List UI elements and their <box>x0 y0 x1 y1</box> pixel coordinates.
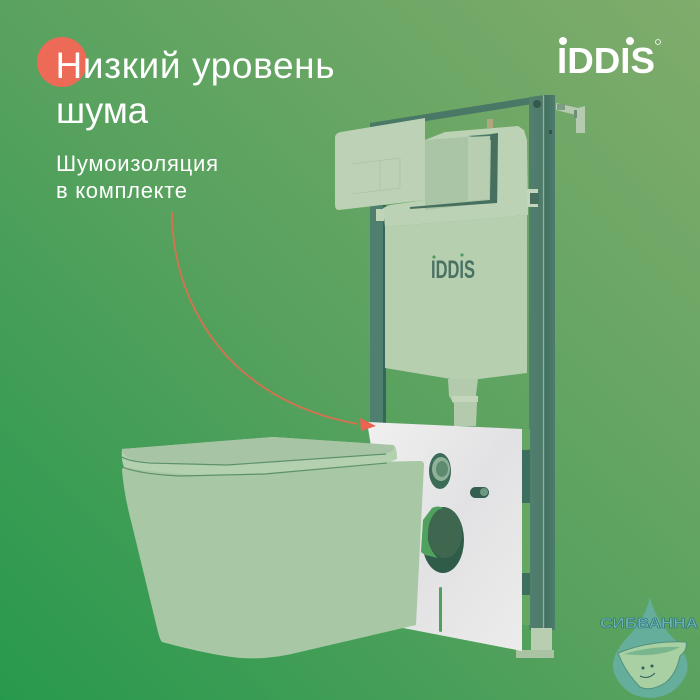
tank logo: IDDIS <box>431 256 475 284</box>
subheading: Шумоизоляция <box>56 151 218 176</box>
subheading: в комплекте <box>56 178 187 203</box>
arrow <box>172 212 376 431</box>
soundproofing panel <box>367 422 522 651</box>
slot <box>439 587 442 632</box>
subheading <box>56 151 218 203</box>
heading: шума <box>56 90 148 131</box>
heading <box>56 45 334 131</box>
tank logo <box>431 253 475 284</box>
flush plate <box>335 118 425 210</box>
watermark: Sibvanna <box>600 597 698 698</box>
toilet seat <box>122 437 397 476</box>
upper opening <box>429 453 451 489</box>
brand logo: IDDIS <box>557 40 655 81</box>
wall bracket <box>556 103 585 133</box>
watermark: Sibvanna: СИБВАННА <box>600 615 698 632</box>
large opening <box>421 506 464 573</box>
heading: Низкий уровень <box>56 45 334 86</box>
tank upper module <box>376 119 539 227</box>
accent circle <box>37 37 87 87</box>
installation frame <box>370 95 555 658</box>
cistern tank <box>385 215 527 381</box>
toilet bowl <box>122 437 424 658</box>
drain pipe <box>448 379 478 426</box>
small opening <box>470 487 489 498</box>
